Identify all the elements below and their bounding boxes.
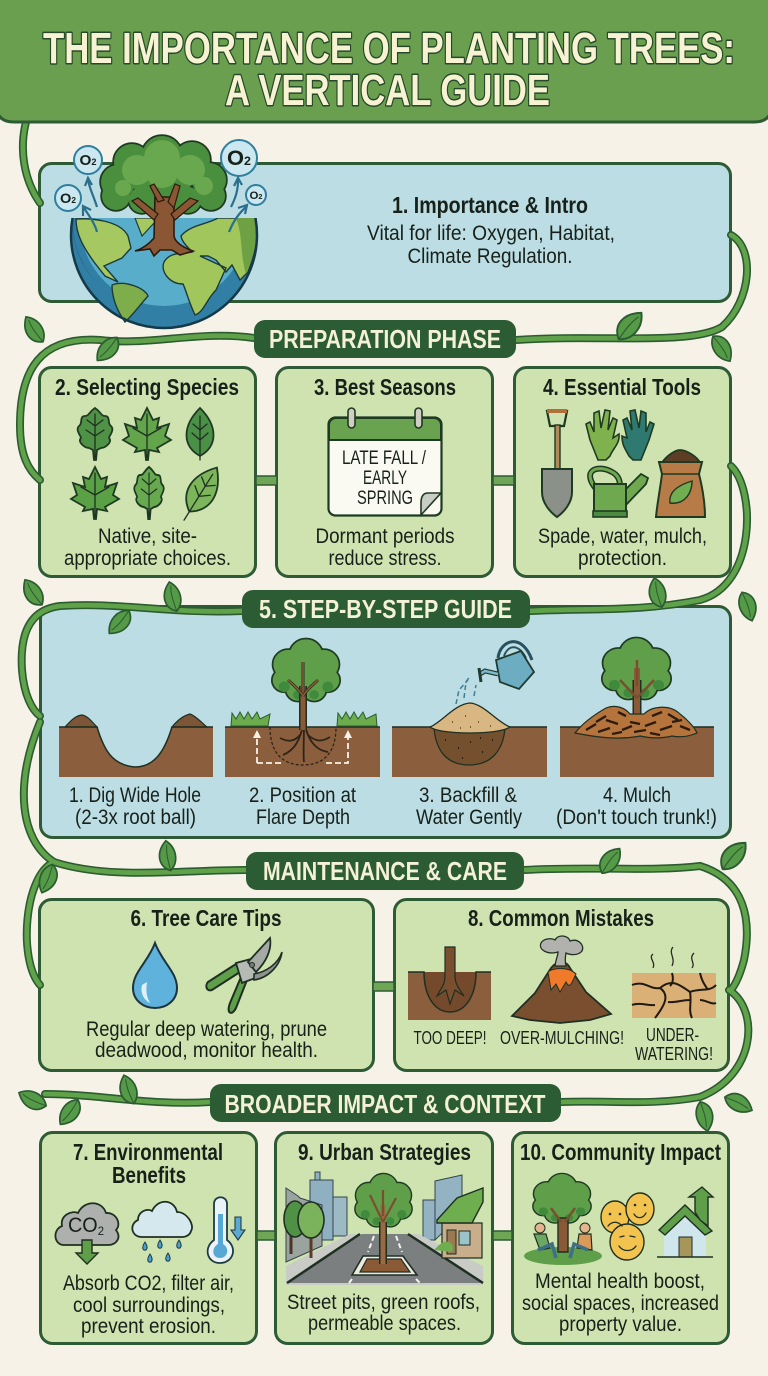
header banner with title bbox=[0, 0, 768, 122]
text: mulch: (Don't touch trunk!) bbox=[556, 806, 717, 829]
arrows rising bbox=[83, 178, 247, 232]
band: maintenance and care bbox=[246, 852, 524, 890]
panel: essential tools bbox=[514, 368, 730, 576]
heading: common mistakes: 8. Common Mistakes bbox=[468, 905, 654, 931]
big tree bbox=[101, 136, 226, 256]
text: backfill and water gently: 3. Backfill & bbox=[419, 784, 517, 807]
band: maintenance and care: MAINTENANCE & CARE bbox=[263, 856, 507, 886]
oxygen bubbles bbox=[55, 140, 266, 211]
text: urban strategies: permeable spaces. bbox=[308, 1312, 461, 1335]
text: tree care tips: deadwood, monitor health. bbox=[95, 1039, 318, 1062]
heading: environmental benefits: 7. Environmental bbox=[73, 1139, 223, 1165]
connectors between panels bbox=[256, 476, 514, 1240]
heading: urban strategies: 9. Urban Strategies bbox=[298, 1139, 471, 1165]
icon: water drop bbox=[133, 943, 177, 1008]
text: tree care tips: Regular deep watering, prune bbox=[86, 1018, 327, 1041]
text: environmental benefits: prevent erosion. bbox=[81, 1315, 216, 1338]
globe bbox=[70, 218, 258, 330]
panel: step-by-step guide bbox=[40, 606, 730, 838]
text: dormant periods bbox=[316, 525, 454, 570]
title: A VERTICAL GUIDE bbox=[225, 66, 550, 115]
panel: urban strategies bbox=[276, 1132, 492, 1344]
icon: co2 cloud: 2 bbox=[98, 1224, 104, 1238]
panel: best seasons bbox=[276, 368, 492, 576]
icon: co2 cloud: CO bbox=[68, 1214, 100, 1237]
icon: blue watering can bbox=[479, 642, 534, 689]
text: position at flare depth bbox=[249, 784, 356, 829]
icon: mulch bag bbox=[656, 450, 705, 517]
text: vital for life: Vital for life: Oxygen, Habitat, bbox=[367, 222, 615, 245]
heading: best seasons: 3. Best Seasons bbox=[314, 374, 456, 400]
text: dormant periods: Dormant periods bbox=[316, 525, 454, 548]
text: mistake labels bbox=[414, 1025, 713, 1064]
text: tree care tips bbox=[86, 1018, 327, 1062]
icon: house with rising arrow bbox=[657, 1187, 713, 1257]
text: community impact: Mental health boost, bbox=[535, 1270, 705, 1293]
text: mulch bbox=[556, 784, 717, 829]
text: vital for life bbox=[367, 222, 615, 268]
icon: gloves bbox=[586, 410, 654, 460]
text: spade water mulch: Spade, water, mulch, bbox=[538, 525, 707, 548]
icon: globe with tree and oxygen bubbles bbox=[55, 136, 266, 328]
heading: environmental benefits bbox=[73, 1139, 223, 1188]
icon: rain cloud bbox=[132, 1202, 192, 1262]
panel: selecting species bbox=[40, 368, 256, 576]
oxygen bubbles: O2 bbox=[250, 190, 263, 202]
icon: watering can bbox=[590, 469, 648, 517]
vines bbox=[20, 122, 748, 1103]
text: community impact: social spaces, increased bbox=[522, 1292, 719, 1315]
text: urban strategies bbox=[287, 1291, 480, 1335]
heading: community impact: 10. Community Impact bbox=[520, 1139, 721, 1165]
text: dormant periods: reduce stress. bbox=[328, 547, 442, 570]
illustration: urban street bbox=[284, 1172, 483, 1285]
scene: backfill and water bbox=[392, 642, 547, 777]
text: position at flare depth: Flare Depth bbox=[256, 806, 350, 829]
text: late fall early spring: SPRING bbox=[357, 488, 413, 509]
panel: tree care tips bbox=[40, 900, 374, 1070]
band: step-by-step guide: 5. STEP-BY-STEP GUIDE bbox=[259, 594, 512, 624]
leaves on vines bbox=[15, 306, 762, 1133]
text: mulch: 4. Mulch bbox=[603, 784, 671, 807]
text: urban strategies: Street pits, green roofs, bbox=[287, 1291, 480, 1314]
text: position at flare depth: 2. Position at bbox=[249, 784, 356, 807]
text: backfill and water gently: Water Gently bbox=[416, 806, 522, 829]
heading: importance and intro: 1. Importance & Intro bbox=[392, 192, 588, 218]
band: preparation phase: PREPARATION PHASE bbox=[269, 324, 501, 354]
band: step-by-step guide bbox=[242, 590, 530, 628]
band: broader impact and context bbox=[210, 1084, 561, 1122]
scene: dig wide hole bbox=[59, 714, 213, 777]
icon: spade bbox=[542, 411, 572, 517]
text: mistake labels: TOO DEEP! bbox=[414, 1028, 486, 1048]
text: community impact: property value. bbox=[559, 1313, 682, 1336]
panel: importance and intro bbox=[40, 164, 730, 302]
heading: selecting species: 2. Selecting Species bbox=[55, 374, 239, 400]
heading: tree care tips: 6. Tree Care Tips bbox=[130, 905, 282, 931]
icon: thermometer bbox=[208, 1197, 245, 1263]
icon: under-watering cracked earth bbox=[632, 947, 716, 1018]
icon: co2 cloud bbox=[55, 1203, 118, 1264]
text: environmental benefits bbox=[63, 1272, 234, 1338]
text: backfill and water gently bbox=[416, 784, 522, 829]
text: spade water mulch: protection. bbox=[578, 547, 667, 570]
text: dig wide hole: 1. Dig Wide Hole bbox=[69, 784, 201, 807]
panel: environmental benefits bbox=[40, 1132, 256, 1344]
heading: essential tools: 4. Essential Tools bbox=[543, 374, 701, 400]
text: late fall early spring bbox=[342, 448, 427, 509]
text: native choices: appropriate choices. bbox=[64, 547, 231, 570]
text: late fall early spring: LATE FALL / bbox=[342, 448, 427, 469]
text: mistake labels: WATERING! bbox=[635, 1044, 713, 1064]
text: vital for life: Climate Regulation. bbox=[408, 245, 572, 268]
icon: smiling faces bbox=[601, 1193, 654, 1260]
heading: environmental benefits: Benefits bbox=[112, 1162, 186, 1188]
panel: common mistakes bbox=[394, 900, 728, 1070]
text: dig wide hole: (2-3x root ball) bbox=[75, 806, 196, 829]
icon: calendar bbox=[328, 408, 442, 516]
icon: six leaf species bbox=[71, 408, 228, 527]
title bbox=[43, 24, 735, 115]
text: mistake labels: UNDER- bbox=[646, 1025, 699, 1045]
oxygen bubbles: O2 bbox=[80, 152, 96, 169]
text: native choices: Native, site- bbox=[98, 525, 197, 548]
scene: mulch bbox=[560, 638, 714, 777]
oxygen bubbles: O2 bbox=[60, 190, 77, 206]
band: preparation phase bbox=[254, 320, 516, 358]
icon: over-mulching volcano bbox=[512, 936, 611, 1023]
icon: people under tree bbox=[524, 1174, 602, 1265]
panel: community impact bbox=[512, 1132, 728, 1344]
band: broader impact and context: BROADER IMPACT & CONTEXT bbox=[224, 1089, 546, 1119]
text: environmental benefits: cool surroundings, bbox=[73, 1294, 225, 1317]
text: late fall early spring: EARLY bbox=[363, 468, 407, 489]
icon: pruning shears bbox=[206, 938, 282, 1013]
text: community impact bbox=[522, 1270, 719, 1336]
text: mistake labels: OVER-MULCHING! bbox=[500, 1028, 624, 1048]
scene: position at flare depth bbox=[225, 639, 380, 777]
icon: too deep bbox=[408, 947, 491, 1020]
text: environmental benefits: Absorb CO2, filter air, bbox=[63, 1272, 234, 1295]
text: spade water mulch bbox=[538, 525, 707, 570]
oxygen bubbles: O2 bbox=[227, 147, 251, 170]
text: dig wide hole bbox=[69, 784, 201, 829]
text: native choices bbox=[64, 525, 231, 570]
